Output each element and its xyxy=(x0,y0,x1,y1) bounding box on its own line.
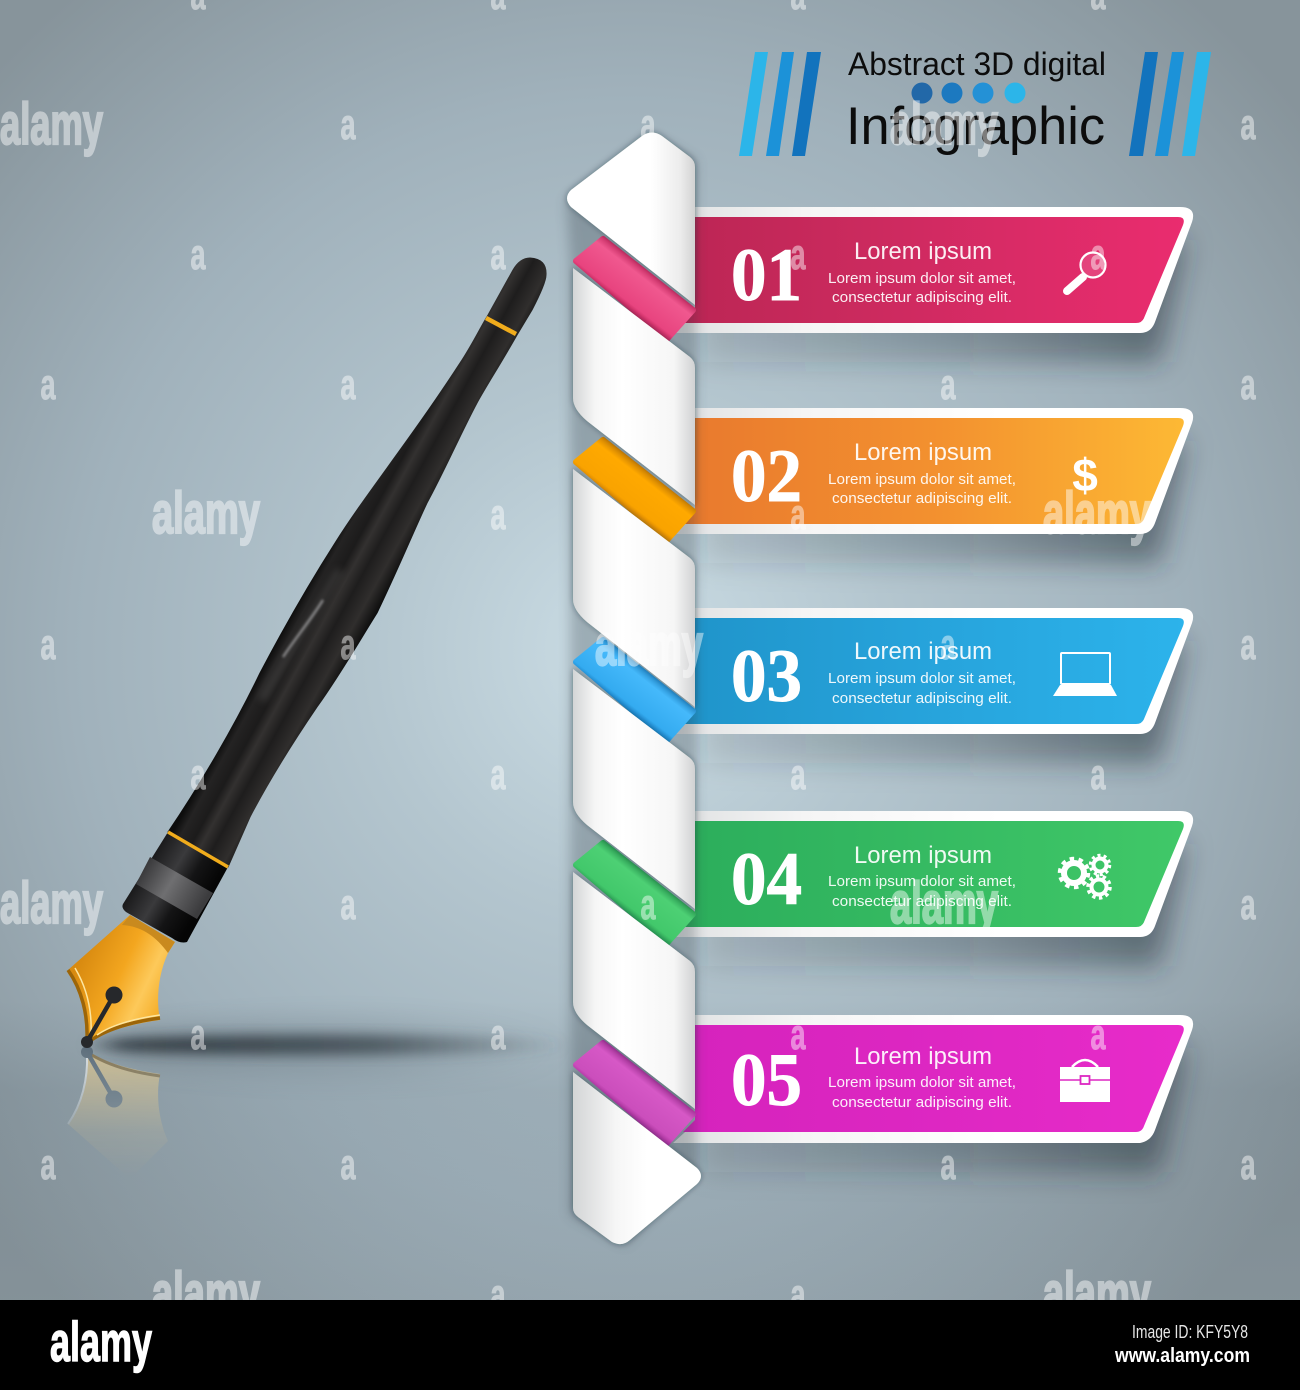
watermark pattern: alamy xyxy=(0,92,103,157)
right stripes xyxy=(1129,52,1211,156)
watermark pattern: a xyxy=(790,491,806,539)
ribbon segment bottom xyxy=(573,1072,701,1244)
grip band xyxy=(136,857,213,919)
icon: laptop xyxy=(1053,653,1117,696)
watermark pattern: a xyxy=(790,751,806,799)
text 02: Lorem ipsum xyxy=(854,439,992,466)
pen cast shadow xyxy=(85,1022,590,1074)
watermark pattern: a xyxy=(1090,1011,1106,1059)
watermark pattern: a xyxy=(790,1011,806,1059)
number 01: 01 xyxy=(731,234,802,317)
icon: dollar: $ xyxy=(1072,449,1098,501)
watermark pattern: a xyxy=(1240,101,1256,149)
watermark pattern: alamy xyxy=(0,871,103,936)
watermark pattern: a xyxy=(40,361,56,409)
watermark pattern: a xyxy=(490,1011,506,1059)
heading line 1: Abstract 3D digital xyxy=(848,46,1106,82)
watermark pattern: a xyxy=(490,491,506,539)
footer bar xyxy=(0,1300,1300,1390)
watermark pattern: alamy xyxy=(890,92,998,157)
watermark pattern: alamy xyxy=(595,613,703,678)
watermark pattern: a xyxy=(190,1011,206,1059)
fold magenta xyxy=(576,1043,693,1143)
number 03: 03 xyxy=(731,635,802,718)
watermark pattern: a xyxy=(1090,751,1106,799)
text 05: consectetur adipiscing elit. xyxy=(832,1094,1012,1111)
watermark pattern: a xyxy=(1240,881,1256,929)
text 03 xyxy=(828,638,1016,707)
nib edges xyxy=(68,970,160,1041)
ribbon segment 1 xyxy=(573,268,695,505)
watermark pattern: a xyxy=(640,101,656,149)
watermark pattern: a xyxy=(1240,361,1256,409)
image id: Image ID: KFY5Y8 xyxy=(1132,1322,1248,1342)
banner shadows xyxy=(700,240,1185,1172)
watermark pattern: a xyxy=(340,621,356,669)
fold green xyxy=(576,843,693,943)
text 03: Lorem ipsum dolor sit amet, xyxy=(828,670,1016,687)
text 04: consectetur adipiscing elit. xyxy=(832,893,1012,910)
top gold ring xyxy=(486,318,516,334)
pen grip xyxy=(122,832,228,942)
title block xyxy=(739,46,1211,156)
ribbon folds xyxy=(576,239,693,1143)
banner 04 xyxy=(673,811,1193,937)
banner 03 xyxy=(673,608,1193,734)
text 05: Lorem ipsum xyxy=(854,1043,992,1070)
watermark pattern: a xyxy=(190,751,206,799)
text 02 xyxy=(828,439,1016,507)
banner 05 xyxy=(673,1015,1193,1143)
text 02: consectetur adipiscing elit. xyxy=(832,490,1012,507)
footer logo: alamy xyxy=(50,1310,152,1373)
banner 02 xyxy=(673,408,1193,534)
watermark pattern: a xyxy=(340,361,356,409)
watermark pattern: a xyxy=(940,361,956,409)
text 05 xyxy=(828,1043,1016,1111)
watermark pattern: a xyxy=(490,231,506,279)
number 04: 04 xyxy=(731,838,802,921)
number 05: 05 xyxy=(731,1039,802,1122)
watermark pattern: a xyxy=(340,1141,356,1189)
ribbon shadow xyxy=(566,135,696,1245)
ribbon segment 3 xyxy=(573,669,695,909)
text 04 xyxy=(828,842,1016,910)
ribbon segment 4 xyxy=(573,872,695,1109)
pen soft sheen xyxy=(262,570,340,700)
nib breather hole and slit xyxy=(87,995,114,1042)
watermark pattern: alamy xyxy=(1043,481,1151,546)
watermark pattern: a xyxy=(40,1141,56,1189)
watermark pattern: alamy xyxy=(890,871,998,936)
watermark pattern: alamy xyxy=(1043,1261,1151,1326)
left stripes xyxy=(739,52,821,156)
website: www.alamy.com xyxy=(1114,1345,1250,1367)
text 01: Lorem ipsum dolor sit amet, xyxy=(828,270,1016,287)
nib xyxy=(68,915,175,1042)
ribbon segment 2 xyxy=(573,469,695,707)
watermark pattern: alamy xyxy=(152,481,260,546)
pen body xyxy=(168,258,546,867)
watermark pattern: a xyxy=(190,231,206,279)
text 05: Lorem ipsum dolor sit amet, xyxy=(828,1074,1016,1091)
fold orange xyxy=(576,440,693,540)
icon: gears xyxy=(1060,856,1110,898)
dots xyxy=(912,82,1026,104)
watermark pattern: a xyxy=(1240,621,1256,669)
icon: magnifier xyxy=(1067,252,1106,291)
nib reflection xyxy=(68,1047,168,1142)
nib shoulder xyxy=(122,915,175,953)
white ribbon xyxy=(567,132,701,1244)
watermark pattern: a xyxy=(790,231,806,279)
banner 01 xyxy=(673,207,1193,333)
pen highlight xyxy=(283,600,323,657)
watermark pattern: alamy xyxy=(152,1261,260,1326)
pen xyxy=(68,258,546,1048)
watermark pattern: a xyxy=(490,751,506,799)
watermark pattern: a xyxy=(640,881,656,929)
watermark pattern: a xyxy=(790,1271,806,1319)
number 02: 02 xyxy=(731,435,802,518)
watermark pattern: a xyxy=(490,1271,506,1319)
text 01 xyxy=(828,238,1016,306)
text 01: Lorem ipsum xyxy=(854,238,992,265)
watermark pattern: a xyxy=(940,621,956,669)
watermark pattern: a xyxy=(1090,231,1106,279)
watermark pattern: a xyxy=(1240,1141,1256,1189)
heading line 2: Infographic xyxy=(846,97,1105,156)
text 01: consectetur adipiscing elit. xyxy=(832,289,1012,306)
ribbon segment top xyxy=(567,132,695,305)
text 03: consectetur adipiscing elit. xyxy=(832,690,1012,707)
fold pink xyxy=(576,239,693,339)
text 03: Lorem ipsum xyxy=(854,638,992,665)
text 04: Lorem ipsum dolor sit amet, xyxy=(828,873,1016,890)
watermark pattern: a xyxy=(340,101,356,149)
watermark pattern: a xyxy=(340,881,356,929)
icon: briefcase xyxy=(1060,1060,1110,1102)
grip gold ring xyxy=(168,832,228,867)
watermark pattern: a xyxy=(40,621,56,669)
fold blue xyxy=(576,640,693,740)
text 04: Lorem ipsum xyxy=(854,842,992,869)
text 02: Lorem ipsum dolor sit amet, xyxy=(828,471,1016,488)
watermark pattern: a xyxy=(940,1141,956,1189)
